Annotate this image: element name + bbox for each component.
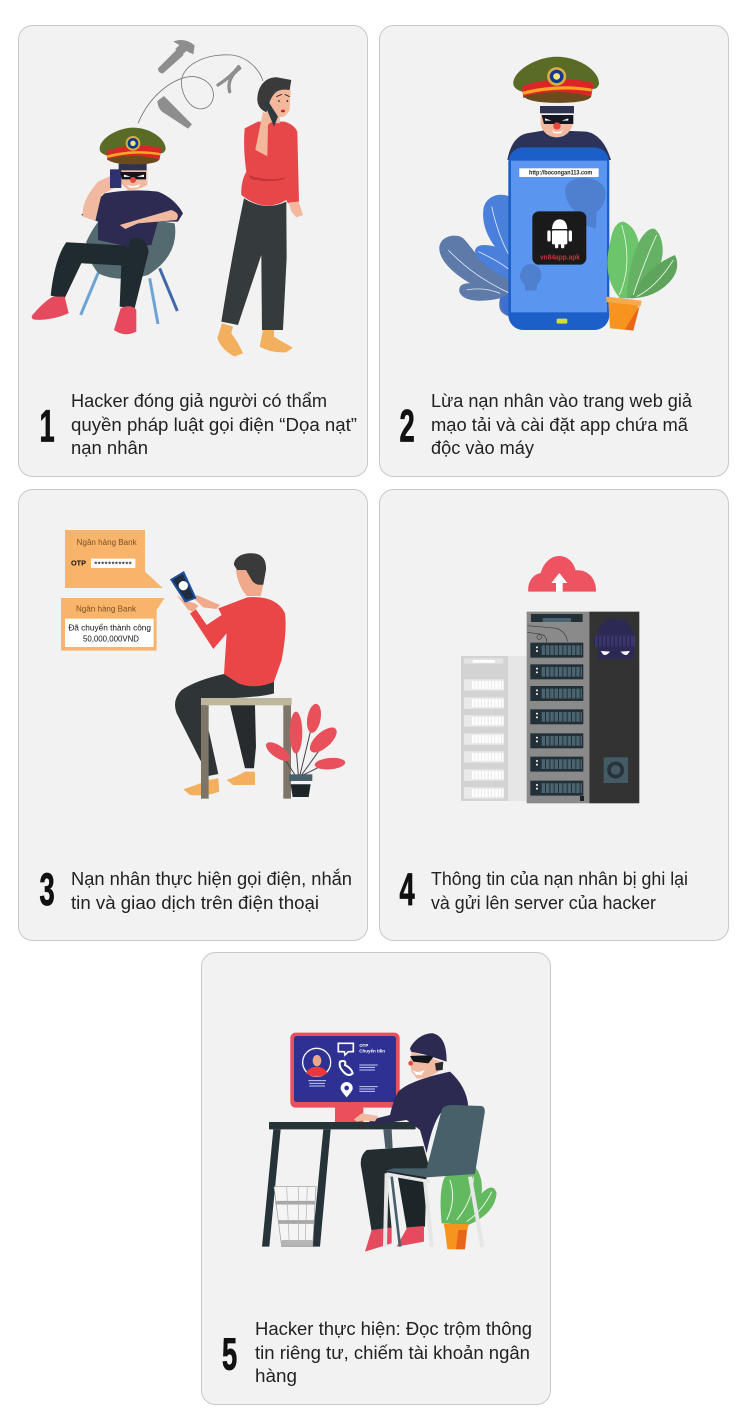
callout: transfer message bbox=[61, 598, 165, 651]
step 1 number: 1 bbox=[40, 400, 55, 451]
card 5 background bbox=[202, 952, 550, 1404]
step 4 number: 4 bbox=[400, 864, 415, 915]
green plant bbox=[607, 222, 677, 298]
card 4 background bbox=[380, 490, 728, 940]
illustration: victim using phone bbox=[61, 530, 346, 799]
panel: step 1 bbox=[18, 26, 368, 476]
rack door bbox=[589, 612, 639, 803]
callout: OTP message: Ngân hàng Bank bbox=[77, 537, 137, 547]
office chair bbox=[385, 1105, 485, 1247]
step 5 text: hàng bbox=[255, 1365, 297, 1386]
step 5 text: tin riêng tư, chiếm tài khoản ngân bbox=[255, 1342, 530, 1363]
step 4 text: Thông tin của nạn nhân bị ghi lại bbox=[431, 868, 688, 889]
illustration: hacker server bbox=[461, 556, 639, 803]
step 3 number: 3 bbox=[40, 864, 55, 915]
panel: step 2 bbox=[380, 26, 728, 476]
step 3 text: Nạn nhân thực hiện gọi điện, nhắn bbox=[71, 868, 352, 889]
arc of threats bbox=[138, 55, 263, 123]
stool bbox=[201, 698, 292, 799]
phone bbox=[508, 147, 609, 330]
faded rack bbox=[461, 656, 527, 801]
seated man bbox=[170, 553, 286, 795]
red plant bbox=[263, 703, 346, 797]
waste basket bbox=[274, 1187, 316, 1247]
step 2 text: mạo tải và cài đặt app chứa mã bbox=[431, 414, 689, 435]
step 1 text: nạn nhân bbox=[71, 437, 148, 458]
police cap bbox=[100, 128, 166, 164]
step 1 text bbox=[71, 390, 357, 458]
desk bbox=[262, 1122, 416, 1247]
step 4 text: và gửi lên server của hacker bbox=[431, 892, 656, 913]
illustration: fake website on phone bbox=[439, 57, 677, 331]
app icon: vn84app.apk bbox=[540, 254, 580, 261]
step 5 number: 5 bbox=[222, 1328, 237, 1379]
app icon bbox=[532, 211, 586, 265]
step 5 text bbox=[255, 1318, 532, 1386]
step 3 text bbox=[71, 868, 352, 913]
skulls bbox=[520, 178, 606, 291]
step 5 text: Hacker thực hiện: Đọc trộm thông bbox=[255, 1318, 532, 1339]
hacker head bbox=[594, 618, 635, 659]
hacker at desk bbox=[354, 1033, 468, 1252]
card 3 background bbox=[18, 490, 368, 940]
step 2 number: 2 bbox=[400, 400, 415, 451]
step 1 text: Hacker đóng giả người có thẩm bbox=[71, 390, 327, 411]
panel: step 5 bbox=[202, 952, 550, 1404]
step 2 text bbox=[431, 390, 693, 458]
chair bbox=[81, 213, 177, 324]
icon: pliers bbox=[218, 67, 240, 92]
callout: transfer message: 50,000,000VND bbox=[83, 634, 139, 644]
monitor: Chuyển tiền bbox=[359, 1048, 385, 1053]
callout: transfer message: Ngân hàng Bank bbox=[76, 604, 137, 614]
icon: hammer bbox=[158, 40, 195, 73]
green plant bbox=[441, 1167, 497, 1249]
step 2 text: độc vào máy bbox=[431, 437, 535, 458]
step 2 text: Lừa nạn nhân vào trang web giả bbox=[431, 390, 693, 411]
monitor bbox=[290, 1033, 400, 1123]
flower pot bbox=[606, 297, 642, 331]
URL bar: http://bocongan113.com bbox=[529, 170, 592, 176]
panel: step 3 bbox=[18, 490, 368, 940]
illustration: hacker at computer bbox=[262, 1033, 497, 1252]
URL bar bbox=[519, 168, 599, 177]
hacker behind phone bbox=[507, 106, 611, 160]
callout: OTP message: *********** bbox=[94, 560, 132, 569]
police cap bbox=[513, 57, 599, 103]
card 1 background bbox=[18, 26, 368, 476]
card 2 background bbox=[380, 26, 728, 476]
callout: OTP message bbox=[65, 530, 163, 588]
main rack bbox=[527, 612, 589, 803]
speaker bbox=[604, 757, 628, 783]
callout: transfer message: Đã chuyển thành công bbox=[68, 623, 151, 633]
victim bbox=[217, 77, 303, 357]
icon: saw bbox=[157, 96, 192, 129]
blue plant bbox=[439, 195, 510, 317]
hacker body bbox=[32, 164, 183, 334]
step 3 text: tin và giao dịch trên điện thoại bbox=[71, 892, 319, 913]
monitor: OTP bbox=[359, 1043, 368, 1048]
step 1 text: quyền pháp luật gọi điện “Dọa nạt” bbox=[71, 414, 357, 435]
step 4 text bbox=[431, 868, 688, 913]
callout: OTP message: OTP bbox=[71, 559, 86, 568]
illustration: hacker calling victim bbox=[32, 40, 303, 357]
panel: step 4 bbox=[380, 490, 728, 940]
icon: upload cloud bbox=[528, 556, 596, 592]
